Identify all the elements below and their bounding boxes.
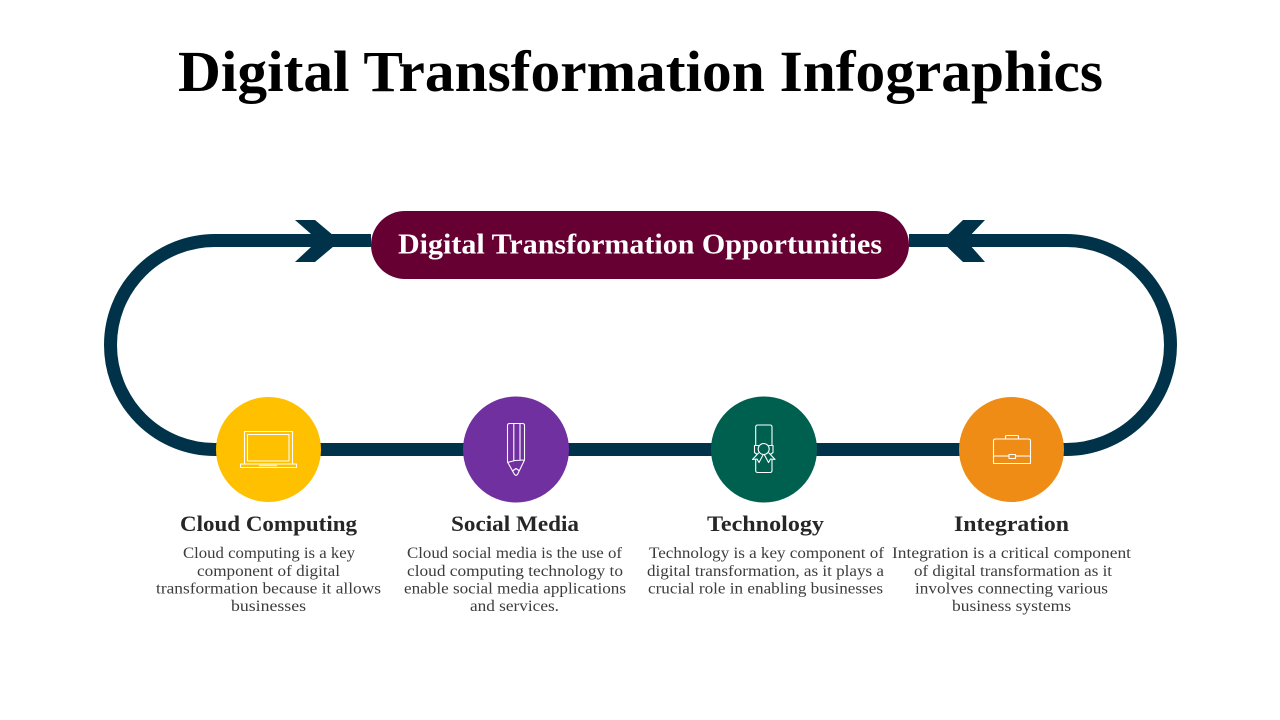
description: digital transformation, as it plays a — [647, 563, 884, 580]
icon: certificate on green circle — [711, 396, 817, 502]
description — [156, 545, 381, 615]
description — [892, 545, 1132, 615]
track loop — [110, 240, 1170, 450]
icon: laptop on yellow circle — [216, 397, 321, 502]
description: and services. — [470, 598, 559, 615]
arrow: left — [295, 220, 340, 262]
arrow: right — [941, 220, 985, 262]
description: involves connecting various — [915, 580, 1108, 598]
description — [647, 545, 885, 598]
description: business systems — [952, 598, 1071, 615]
description: component of digital — [197, 563, 341, 580]
description: businesses — [231, 598, 306, 615]
description: cloud computing technology to — [407, 563, 623, 580]
description: transformation because it allows — [156, 580, 381, 598]
step: Technology — [647, 396, 885, 598]
description: Cloud social media is the use of — [407, 545, 623, 562]
description: Cloud computing is a key — [183, 545, 355, 562]
icon: briefcase on orange circle — [959, 397, 1064, 502]
step: Social Media — [404, 396, 626, 615]
description — [404, 545, 626, 615]
banner: Digital Transformation Opportunities: Digital Transformation Opportunities — [398, 230, 882, 260]
banner: Digital Transformation Opportunities — [371, 211, 909, 279]
description: crucial role in enabling businesses — [648, 580, 883, 598]
description: enable social media applications — [404, 580, 626, 598]
heading: Social Media — [451, 511, 579, 536]
description: Integration is a critical component — [892, 545, 1132, 562]
title: Digital Transformation Infographics — [178, 39, 1103, 104]
heading: Cloud Computing — [180, 511, 358, 536]
heading: Integration — [954, 511, 1070, 536]
description: Technology is a key component of — [649, 545, 885, 562]
step: Integration — [892, 397, 1132, 615]
icon: pencil on purple circle — [463, 396, 569, 502]
heading: Technology — [707, 511, 825, 536]
step: Cloud Computing — [156, 397, 381, 615]
description: of digital transformation as it — [914, 563, 1113, 580]
